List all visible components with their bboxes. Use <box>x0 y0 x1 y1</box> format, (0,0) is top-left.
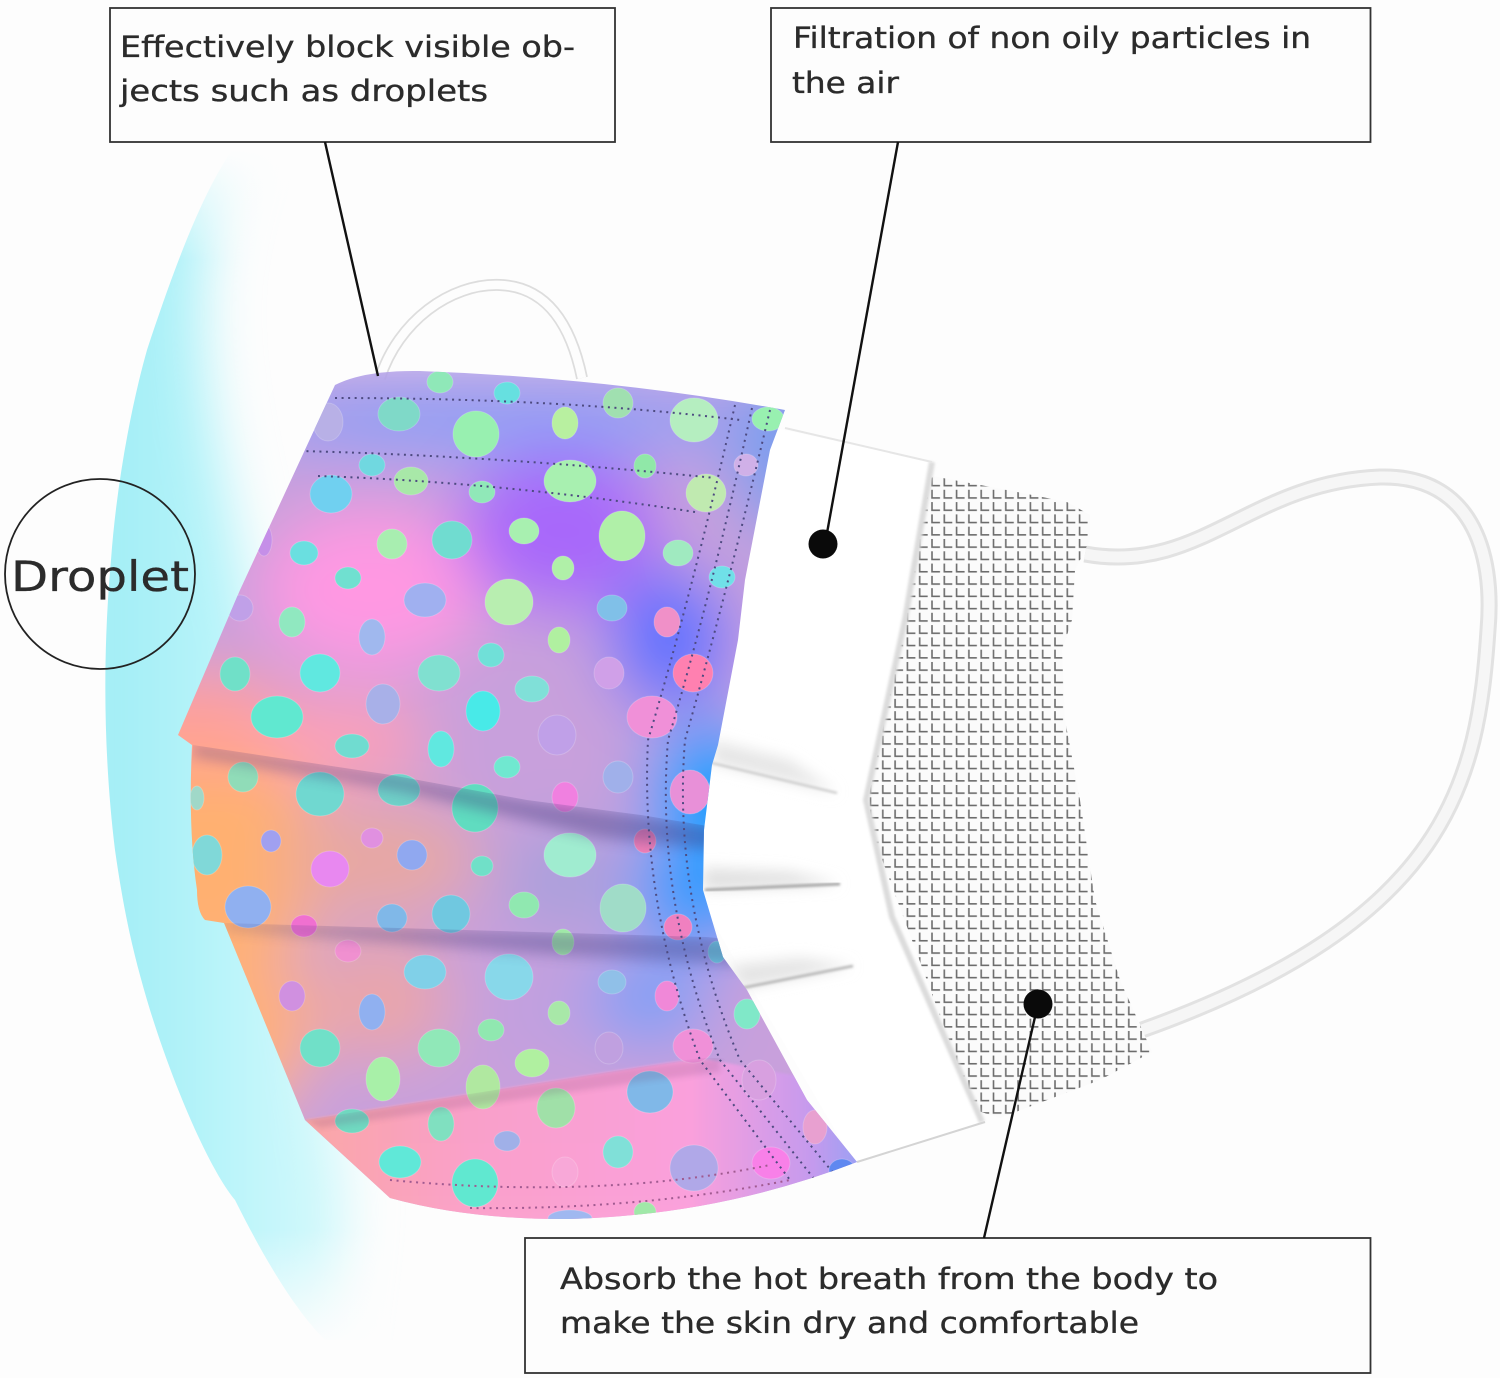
colored mask front <box>178 371 857 1219</box>
callout: block droplets: Effectively block visible ob- <box>120 30 575 64</box>
pleat fold shadows <box>193 745 740 1128</box>
callout: droplet: Droplet <box>11 552 189 601</box>
droplet shield arc <box>105 171 367 1324</box>
callout: absorb breath: make the skin dry and comfortable <box>560 1306 1139 1340</box>
callout: filtration: the air <box>792 66 899 100</box>
leader line: middle layer <box>808 142 898 558</box>
right ear loop <box>1085 477 1489 1030</box>
callout: absorb breath <box>525 1238 1370 1373</box>
lower panel <box>305 1058 857 1219</box>
pleat shadows <box>703 740 853 988</box>
callout: filtration <box>771 8 1370 142</box>
callout: droplet <box>5 479 195 669</box>
leader line: outer layer <box>325 142 378 376</box>
inner mesh layer <box>860 476 1152 1118</box>
callout: block droplets: jects such as droplets <box>119 74 488 108</box>
callout: block droplets <box>110 8 615 142</box>
callout: filtration: Filtration of non oily particles in <box>793 21 1311 55</box>
white mask side band <box>700 428 985 1164</box>
leader line: inner layer <box>984 990 1052 1238</box>
stitch lines <box>300 398 835 1208</box>
polka dots <box>190 371 855 1226</box>
gradient base <box>178 371 857 1219</box>
top ear loop <box>380 285 582 378</box>
callout: absorb breath: Absorb the hot breath from the body to <box>560 1262 1218 1296</box>
